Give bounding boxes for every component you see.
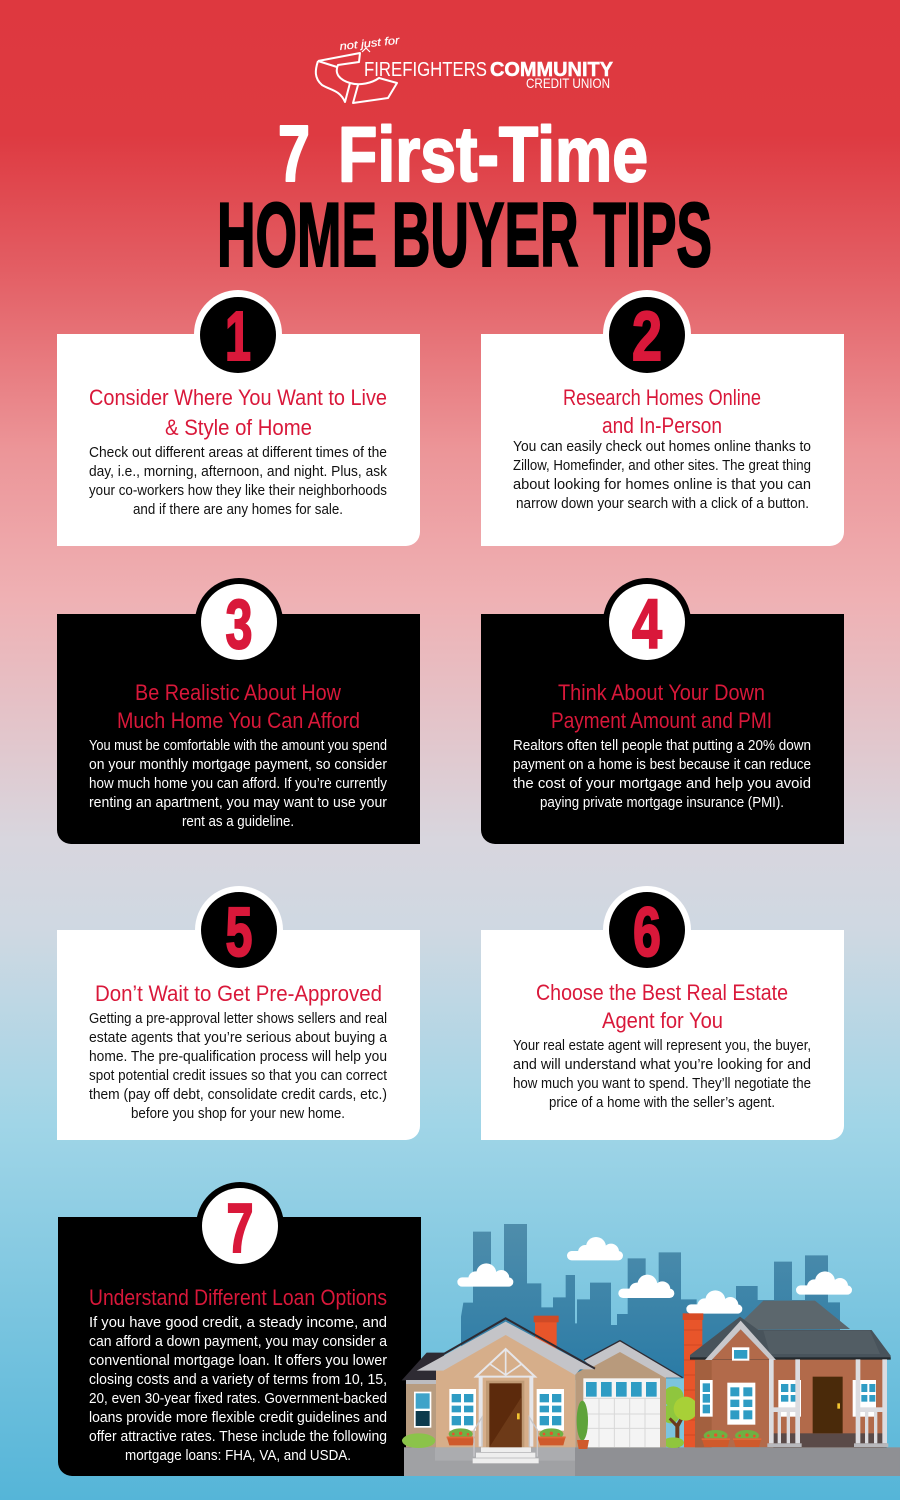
heading: Understand Different Loan Options [89,1285,387,1310]
body text: You can easily check out homes online thanks to [513,439,811,455]
body text: how much you want to spend. They’ll negotiate the [513,1076,811,1092]
logo word: credit union: CREDIT UNION [526,75,610,91]
body text: about looking for homes online is that you can [513,477,811,493]
body text [89,1315,388,1464]
body text: renting an apartment, you may want to use your [89,795,387,811]
body text: the cost of your mortgage and help you avoid [513,776,811,792]
skyline [461,1224,840,1380]
porch and door [476,1349,535,1447]
chimney [534,1316,559,1348]
body text: price of a home with the seller’s agent. [549,1095,775,1111]
heading: Think About Your Down [558,680,765,705]
porch windows [778,1380,876,1417]
house: left [402,1316,683,1463]
heading: Much Home You Can Afford [117,708,360,733]
body text [513,738,811,811]
logo tagline: not just for [339,35,402,53]
wall [695,1359,883,1447]
heading [551,680,772,733]
small window [732,1347,749,1361]
body text: offer attractive rates. These include the following [89,1429,387,1445]
main roof [417,1318,595,1375]
logo word: firefighters: FIREFIGHTERS [364,59,487,81]
side wing [402,1353,445,1447]
logo [316,35,614,103]
heading [117,680,360,733]
heading [536,980,788,1033]
lower roof [690,1317,891,1360]
body text: Your real estate agent will represent you, the buyer, [513,1038,811,1054]
body text: Zillow, Homefinder, and other sites. The great thing [513,458,811,474]
planters [447,1428,566,1445]
body text: spot potential credit issues so that you can correct [89,1068,387,1084]
body text: You must be comfortable with the amount you spend [89,738,387,754]
panel: tip 2 [481,290,844,546]
heading: Don’t Wait to Get Pre-Approved [95,981,382,1006]
body text: on your monthly mortgage payment, so consider [89,757,387,773]
body text: how much home you can afford. If you’re currently [89,776,388,792]
number 2: 2 [632,297,662,375]
tree crown [674,1397,698,1421]
door [773,1377,887,1447]
number 6: 6 [633,893,661,971]
number 5: 5 [226,893,252,971]
heading: Agent for You [602,1008,723,1033]
logo word: community: COMMUNITY [490,59,614,81]
panel: tip 4 [481,578,844,844]
body text: loans provide more flexible credit guidelines and [89,1410,387,1426]
panel: tip 1 [57,290,420,546]
body text: before you shop for your new home. [131,1106,345,1122]
body text: Getting a pre-approval letter shows sellers and real [89,1011,387,1027]
body text: conventional mortgage loan. It offers you lower [89,1353,387,1369]
body text: paying private mortgage insurance (PMI). [540,795,784,811]
gable [705,1321,776,1360]
columns [767,1359,888,1447]
icon: helmet [316,48,397,103]
body text [89,1011,388,1122]
garage [576,1341,683,1447]
big window [727,1383,755,1425]
heading: Choose the Best Real Estate [536,980,788,1005]
body text: your co-workers how they like their neighborhoods [89,483,387,499]
clouds [457,1237,852,1314]
body text: mortgage loans: FHA, VA, and USDA. [125,1448,351,1464]
panel: tip 7 [58,1182,421,1476]
body text [89,738,388,830]
body text [89,445,388,518]
main wall [436,1334,576,1447]
panel: tip 5 [57,886,420,1140]
heading: Be Realistic About How [135,680,341,705]
number 3: 3 [226,585,252,663]
body text: and if there are any homes for sale. [133,502,343,518]
heading: Research Homes Online [563,385,761,410]
body text [513,1038,811,1111]
heading: and In-Person [602,413,722,438]
heading: Consider Where You Want to Live [89,385,387,410]
house: right [690,1301,891,1447]
bush [402,1433,435,1448]
body text: 20, even 30-year fixed rates. Government-backed [89,1391,387,1407]
body text: payment on a home is best because it can reduce [513,757,811,773]
body text: and will understand what you’re looking for and [513,1057,811,1073]
heading [563,385,761,438]
heading [89,385,387,440]
number 4: 4 [632,585,662,663]
body text: Check out different areas at different times of the [89,445,387,461]
body text: day, i.e., morning, afternoon, and night. Plus, ask [89,464,388,480]
title: first line: First-Time [338,110,648,198]
brick chimney [683,1313,703,1447]
number 1: 1 [225,297,251,375]
body text: can afford a down payment, you may consider a [89,1334,388,1350]
body text: home. The pre-qualification process will help you [89,1049,387,1065]
steps [473,1417,539,1463]
illustration: neighborhood [402,1224,900,1476]
body text: estate agents that you’re serious about buying a [89,1030,388,1046]
body text: narrow down your search with a click of a button. [516,496,809,512]
number 7: 7 [226,1189,254,1267]
heading: & Style of Home [165,415,312,440]
panel: tip 6 [481,886,844,1140]
tree [661,1378,686,1448]
body text: If you have good credit, a steady income, and [89,1315,387,1331]
body text: Realtors often tell people that putting a 20% down [513,738,811,754]
body text: rent as a guideline. [182,814,294,830]
planters [702,1430,761,1447]
side window [700,1380,713,1417]
upper roof [733,1301,850,1330]
heading: Payment Amount and PMI [551,708,772,733]
title: first line: 7 [278,109,310,198]
topiary [577,1401,589,1449]
panel: tip 3 [57,578,420,844]
windows [449,1389,564,1431]
ground [404,1447,900,1476]
body text [513,439,811,512]
body text: closing costs and a variety of terms from 10, 15, [89,1372,387,1388]
body text: them (pay off debt, consolidate credit cards, etc.) [89,1087,387,1103]
